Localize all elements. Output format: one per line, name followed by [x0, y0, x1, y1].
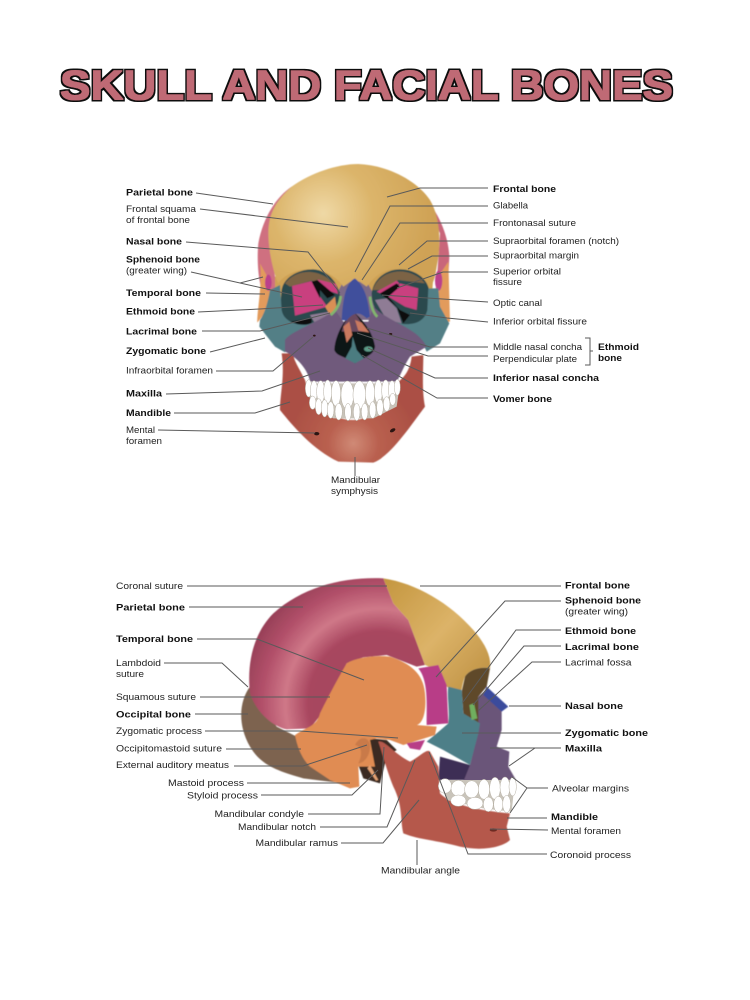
callout: sphenoid greater wing: Sphenoid bone	[565, 596, 641, 606]
callout: maxilla: Maxilla	[565, 744, 603, 754]
frontal bone	[268, 164, 439, 290]
callout: lacrimal bone: Lacrimal bone	[565, 642, 639, 653]
occipital bone	[241, 687, 343, 783]
callout: sphenoid greater wing	[436, 596, 641, 677]
bracket: ethmoid bone: bone	[598, 353, 622, 364]
callout: optic canal	[382, 295, 542, 309]
callouts: side left	[116, 581, 460, 876]
callout: nasal bone: Nasal bone	[126, 236, 182, 248]
callout: occipitomastoid suture: Occipitomastoid suture	[116, 744, 222, 754]
callout: maxilla: Maxilla	[126, 388, 163, 400]
callout: sphenoid bone: (greater wing)	[126, 266, 187, 276]
mental foramen	[490, 828, 497, 832]
callout: squamous suture: Squamous suture	[116, 692, 196, 703]
zygomatic bone, right	[380, 288, 449, 352]
callout: nasal bone: Nasal bone	[565, 701, 623, 712]
callout: frontal bone: Frontal bone	[493, 184, 556, 195]
callout: supraorbital margin	[408, 250, 579, 269]
callout: middle nasal concha	[367, 328, 583, 353]
callout: alveolar margins: Alveolar margins	[552, 784, 629, 794]
callout: inferior orbital fissure	[410, 313, 587, 328]
title: SKULL AND FACIAL BONES	[60, 62, 673, 109]
callout: parietal bone: Parietal bone	[126, 188, 193, 198]
lacrimal bones	[331, 296, 377, 317]
zygomatic bone, left	[259, 285, 330, 352]
callout: mandibular condyle	[214, 747, 384, 820]
callout: parietal bone	[126, 188, 273, 204]
tooth gaps	[307, 383, 400, 418]
panel: lateral view of skull	[116, 578, 648, 876]
maxilla	[285, 307, 427, 382]
callout: coronoid process	[429, 752, 631, 861]
temporal bone	[295, 656, 437, 788]
callout: glabella	[355, 200, 529, 272]
vomer	[345, 337, 364, 363]
callout: glabella: Glabella	[493, 200, 529, 212]
callout: supraorbital foramen: Supraorbital foramen (notch)	[493, 236, 619, 247]
mental foramina	[313, 333, 396, 435]
callout: lambdoid suture	[116, 658, 248, 687]
callout: occipital bone	[116, 710, 248, 720]
callout: mastoid process: Mastoid process	[168, 778, 244, 789]
inferior nasal concha	[364, 346, 373, 352]
side teeth upper	[438, 777, 516, 799]
temporal bone, right	[435, 262, 450, 323]
callout: mandibular symphysis: Mandibular	[331, 475, 380, 486]
nasal aperture	[334, 312, 375, 363]
dark base of skull	[358, 738, 397, 783]
callout: lambdoid suture: Lambdoid	[116, 658, 161, 669]
parietal bone, right	[425, 198, 449, 283]
callout: temporal bone	[116, 634, 364, 680]
mandible	[280, 353, 425, 463]
callout: vomer bone	[362, 355, 552, 405]
orbit	[462, 668, 490, 723]
callout: styloid process	[187, 770, 378, 802]
callouts: front right	[355, 184, 639, 405]
callout: ethmoid bone: Ethmoid bone	[126, 306, 195, 318]
maxilla	[463, 690, 516, 782]
side teeth lower	[451, 795, 511, 813]
callout: zygomatic bone: Zygomatic bone	[126, 346, 206, 357]
callout: nasal bone	[126, 236, 340, 293]
callout: infraorbital foramen	[126, 337, 313, 376]
frontal process under nasal bridge	[333, 282, 377, 320]
callout: maxilla	[490, 744, 603, 766]
callout: inferior orbital fissure: Inferior orbital fissure	[493, 316, 587, 328]
right orbit	[372, 269, 429, 325]
callout: lacrimal bone: Lacrimal bone	[126, 326, 197, 338]
callout: coronal suture: Coronal suture	[116, 581, 183, 592]
callout: mental foramen: Mental	[126, 425, 155, 436]
sphenoid lower	[407, 740, 425, 750]
callout: mental foramen: Mental foramen	[551, 826, 621, 837]
maxilla dark rear	[438, 737, 483, 780]
callout: mandibular angle	[381, 840, 460, 876]
callouts: side right	[420, 580, 648, 861]
callout: mandible: Mandible	[551, 812, 598, 823]
callout: inferior nasal concha	[368, 348, 600, 384]
callout: mental foramen: foramen	[126, 436, 162, 447]
illustration: anterior skull	[257, 164, 450, 463]
callout: external auditory meatus	[116, 745, 367, 771]
callout: mandibular symphysis	[331, 457, 380, 497]
styloid process	[367, 765, 378, 781]
upper nasal cavity	[342, 312, 365, 332]
callout: supraorbital foramen	[399, 236, 619, 265]
callout: frontal squama	[126, 204, 348, 227]
callout: frontal bone	[387, 184, 556, 197]
side tooth gaps	[440, 780, 515, 812]
temporal bone, left	[257, 263, 272, 323]
sphenoid greater wing, right	[435, 271, 442, 291]
callout: inferior nasal concha: Inferior nasal concha	[493, 373, 600, 384]
bracket: ethmoid bone	[585, 338, 639, 365]
callout: coronoid process: Coronoid process	[550, 850, 631, 861]
nasal bone	[483, 687, 508, 712]
callout: parietal bone: Parietal bone	[116, 602, 185, 614]
callout: sphenoid bone	[126, 254, 302, 297]
callouts: front left	[126, 188, 380, 497]
callout: superior orbital fissure: Superior orbital	[493, 266, 561, 278]
callout: mandible	[507, 812, 598, 823]
callout: infraorbital foramen: Infraorbital foramen	[126, 366, 213, 376]
callout: external auditory meatus: External auditory meatus	[116, 760, 229, 771]
callout: mandibular angle: Mandibular angle	[381, 866, 460, 876]
callout: mandibular notch: Mandibular notch	[238, 822, 316, 833]
callout: zygomatic bone: Zygomatic bone	[565, 728, 648, 739]
callout: frontal squama: Frontal squama	[126, 204, 197, 215]
callout: zygomatic process	[116, 726, 398, 738]
external ear canal	[355, 738, 370, 763]
callout: supraorbital margin: Supraorbital margin	[493, 250, 579, 262]
brow base behind orbit rims	[275, 263, 433, 300]
callout: temporal bone: Temporal bone	[126, 288, 201, 299]
callout: temporal bone: Temporal bone	[116, 634, 193, 645]
callout: zygomatic process: Zygomatic process	[116, 726, 202, 737]
callout: lacrimal bone	[473, 642, 639, 705]
callout: mandible	[126, 402, 290, 419]
illustration: lateral skull	[241, 578, 516, 849]
middle nasal conchae	[343, 320, 369, 343]
callout: mandibular ramus: Mandibular ramus	[256, 838, 338, 849]
sphenoid greater wing, left	[265, 275, 272, 291]
nasal bone	[342, 278, 370, 321]
mandible	[378, 742, 510, 849]
callout: mandibular condyle: Mandibular condyle	[214, 809, 304, 820]
callout: maxilla	[126, 371, 320, 400]
callout: vomer bone: Vomer bone	[493, 394, 552, 405]
callout: superior orbital fissure	[397, 266, 561, 288]
callout: mandibular symphysis: symphysis	[331, 486, 378, 497]
callout: middle nasal concha: Middle nasal concha	[493, 342, 583, 353]
callout: mental foramen	[490, 826, 621, 837]
callout: ethmoid bone: Ethmoid bone	[565, 626, 636, 637]
callout: lacrimal bone	[126, 313, 330, 338]
callout: temporal bone	[126, 288, 265, 299]
callout: nasal bone	[509, 701, 623, 712]
lower teeth	[309, 393, 396, 421]
callout: perpendicular plate	[357, 333, 577, 365]
callout: perpendicular plate: Perpendicular plate	[493, 354, 577, 365]
callout: mandibular ramus	[256, 800, 419, 849]
callout: lambdoid suture: suture	[116, 669, 144, 680]
zygomatic bone	[427, 687, 480, 765]
callout: frontal bone: Frontal bone	[565, 580, 630, 592]
callout: lacrimal fossa: Lacrimal fossa	[565, 658, 632, 668]
callout: frontonasal suture	[362, 218, 576, 280]
callout: optic canal: Optic canal	[493, 298, 542, 309]
callout: frontal squama: of frontal bone	[126, 215, 190, 226]
callout: styloid process: Styloid process	[187, 790, 258, 802]
parietal bone	[249, 578, 425, 729]
callout: frontonasal suture: Frontonasal suture	[493, 218, 576, 229]
sphenoid bone	[418, 665, 448, 725]
callout: zygomatic bone	[126, 338, 265, 357]
frontal bone	[383, 578, 490, 695]
callout: sphenoid greater wing: (greater wing)	[565, 606, 628, 618]
callout: mandibular notch	[238, 760, 415, 833]
parietal bone, left	[258, 187, 292, 293]
ethmoid and lacrimal	[469, 703, 477, 720]
callout: ethmoid bone	[126, 305, 323, 318]
callout: lacrimal fossa	[478, 658, 632, 711]
upper teeth	[305, 379, 400, 409]
left orbit	[281, 269, 340, 325]
bracket: ethmoid bone: Ethmoid	[598, 342, 639, 353]
panel: front view of skull	[126, 164, 639, 497]
callout: superior orbital fissure: fissure	[493, 277, 522, 288]
callout: alveolar margins	[510, 777, 629, 813]
callout: mandible: Mandible	[126, 408, 171, 419]
callout: ethmoid bone	[463, 626, 636, 702]
callout: occipital bone: Occipital bone	[116, 710, 191, 720]
callout: mental foramen	[126, 425, 315, 447]
callout: sphenoid bone: Sphenoid bone	[126, 254, 200, 266]
